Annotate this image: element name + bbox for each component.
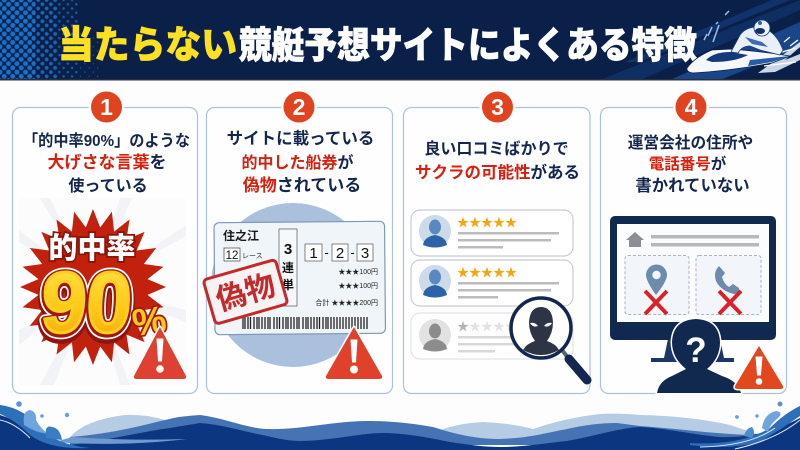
badge 4: 4 [685,94,698,120]
betting ticket: 連 [282,260,294,275]
starburst with 的中率 90%: % [130,299,169,345]
betting ticket: - [350,245,355,260]
panel 3 [404,89,590,394]
panel 1 heading: 大げさな言葉を [48,153,166,172]
badge 4 [673,89,709,125]
review card 2: ★★★★★ [457,266,517,280]
panel 1 [12,89,198,394]
sunburst backdrop [19,198,186,385]
panel 1 heading: 使っている [68,177,148,195]
betting ticket: 2 [336,245,344,262]
starburst with 的中率 90%: 90 [39,256,134,352]
review card 1: ★★★★★ [457,216,517,230]
icon: phone crossed out [715,266,741,314]
icon: location pin crossed out [645,264,667,314]
monitor [610,216,776,362]
waves footer [0,401,800,450]
panel 3 heading [415,139,580,182]
review card 2 [411,260,573,306]
magnifier with masked figure [511,298,587,380]
betting ticket: 12 [226,250,238,262]
warning icon 2 [326,327,382,379]
anonymous person with question mark: ? [685,331,707,370]
warning icon 4 [735,346,783,389]
badge 3: 3 [491,94,504,120]
panel 2 heading: 偽物されている [243,176,361,195]
betting ticket [214,221,385,335]
title white part: 競艇予想サイトによくある特徴 [239,25,697,66]
illustration: racing boat and rider [687,11,800,73]
panel 1 heading [23,132,190,195]
betting ticket: 住之江 [223,228,259,243]
panel 3 heading: サクラの可能性がある [415,162,580,182]
panel 4 heading: 運営会社の住所や [628,133,753,152]
starburst with 的中率 90% [20,209,169,365]
badge 2 [281,89,317,125]
review card 3 faded: ★★★★★ [457,320,517,334]
anonymous person with question mark [657,319,741,393]
panel 2 [203,89,392,394]
starburst with 的中率 90%: 90 [39,256,134,352]
badge 3 [480,89,516,125]
review card 3 faded [411,313,573,359]
panel 4 heading: 書かれていない [635,176,750,195]
warning icon 1 [134,327,186,379]
betting ticket: 1 [309,245,318,262]
badge 1: 1 [100,94,113,120]
panel 4 heading: 電話番号が [649,154,727,173]
betting ticket: - [324,245,329,260]
panel 1 heading: 「的中率90%」のような [23,132,190,150]
betting ticket: ★★★100円 [338,282,378,290]
header banner [0,0,800,80]
title: 当たらない [58,25,237,67]
betting ticket: 3 [284,241,292,258]
betting ticket: 合計 ★★★★200円 [315,298,378,307]
badge 1 [88,89,124,125]
panel 3 heading: 良い口コミばかりで [424,139,569,158]
betting ticket: レース [242,252,263,260]
panel 4 heading [628,133,753,195]
starburst with 的中率 90%: 的中率 [48,232,136,265]
panel 2 heading: 的中した船券が [241,153,354,172]
panel 4 [600,89,786,394]
badge 2: 2 [293,94,305,120]
stamp: 偽物: 偽物 [213,269,279,317]
panel 2 heading: サイトに載っている [227,129,374,148]
betting ticket: ★★★100円 [338,268,378,276]
blue circle [211,203,375,367]
starburst with 的中率 90%: 90 [39,259,134,355]
stamp: 偽物 [203,259,288,324]
panel 2 heading [227,129,374,195]
review card 1 [411,210,573,256]
starburst with 的中率 90%: 90 [39,255,134,351]
betting ticket: 3 [361,245,369,262]
betting ticket: 単 [282,277,294,292]
